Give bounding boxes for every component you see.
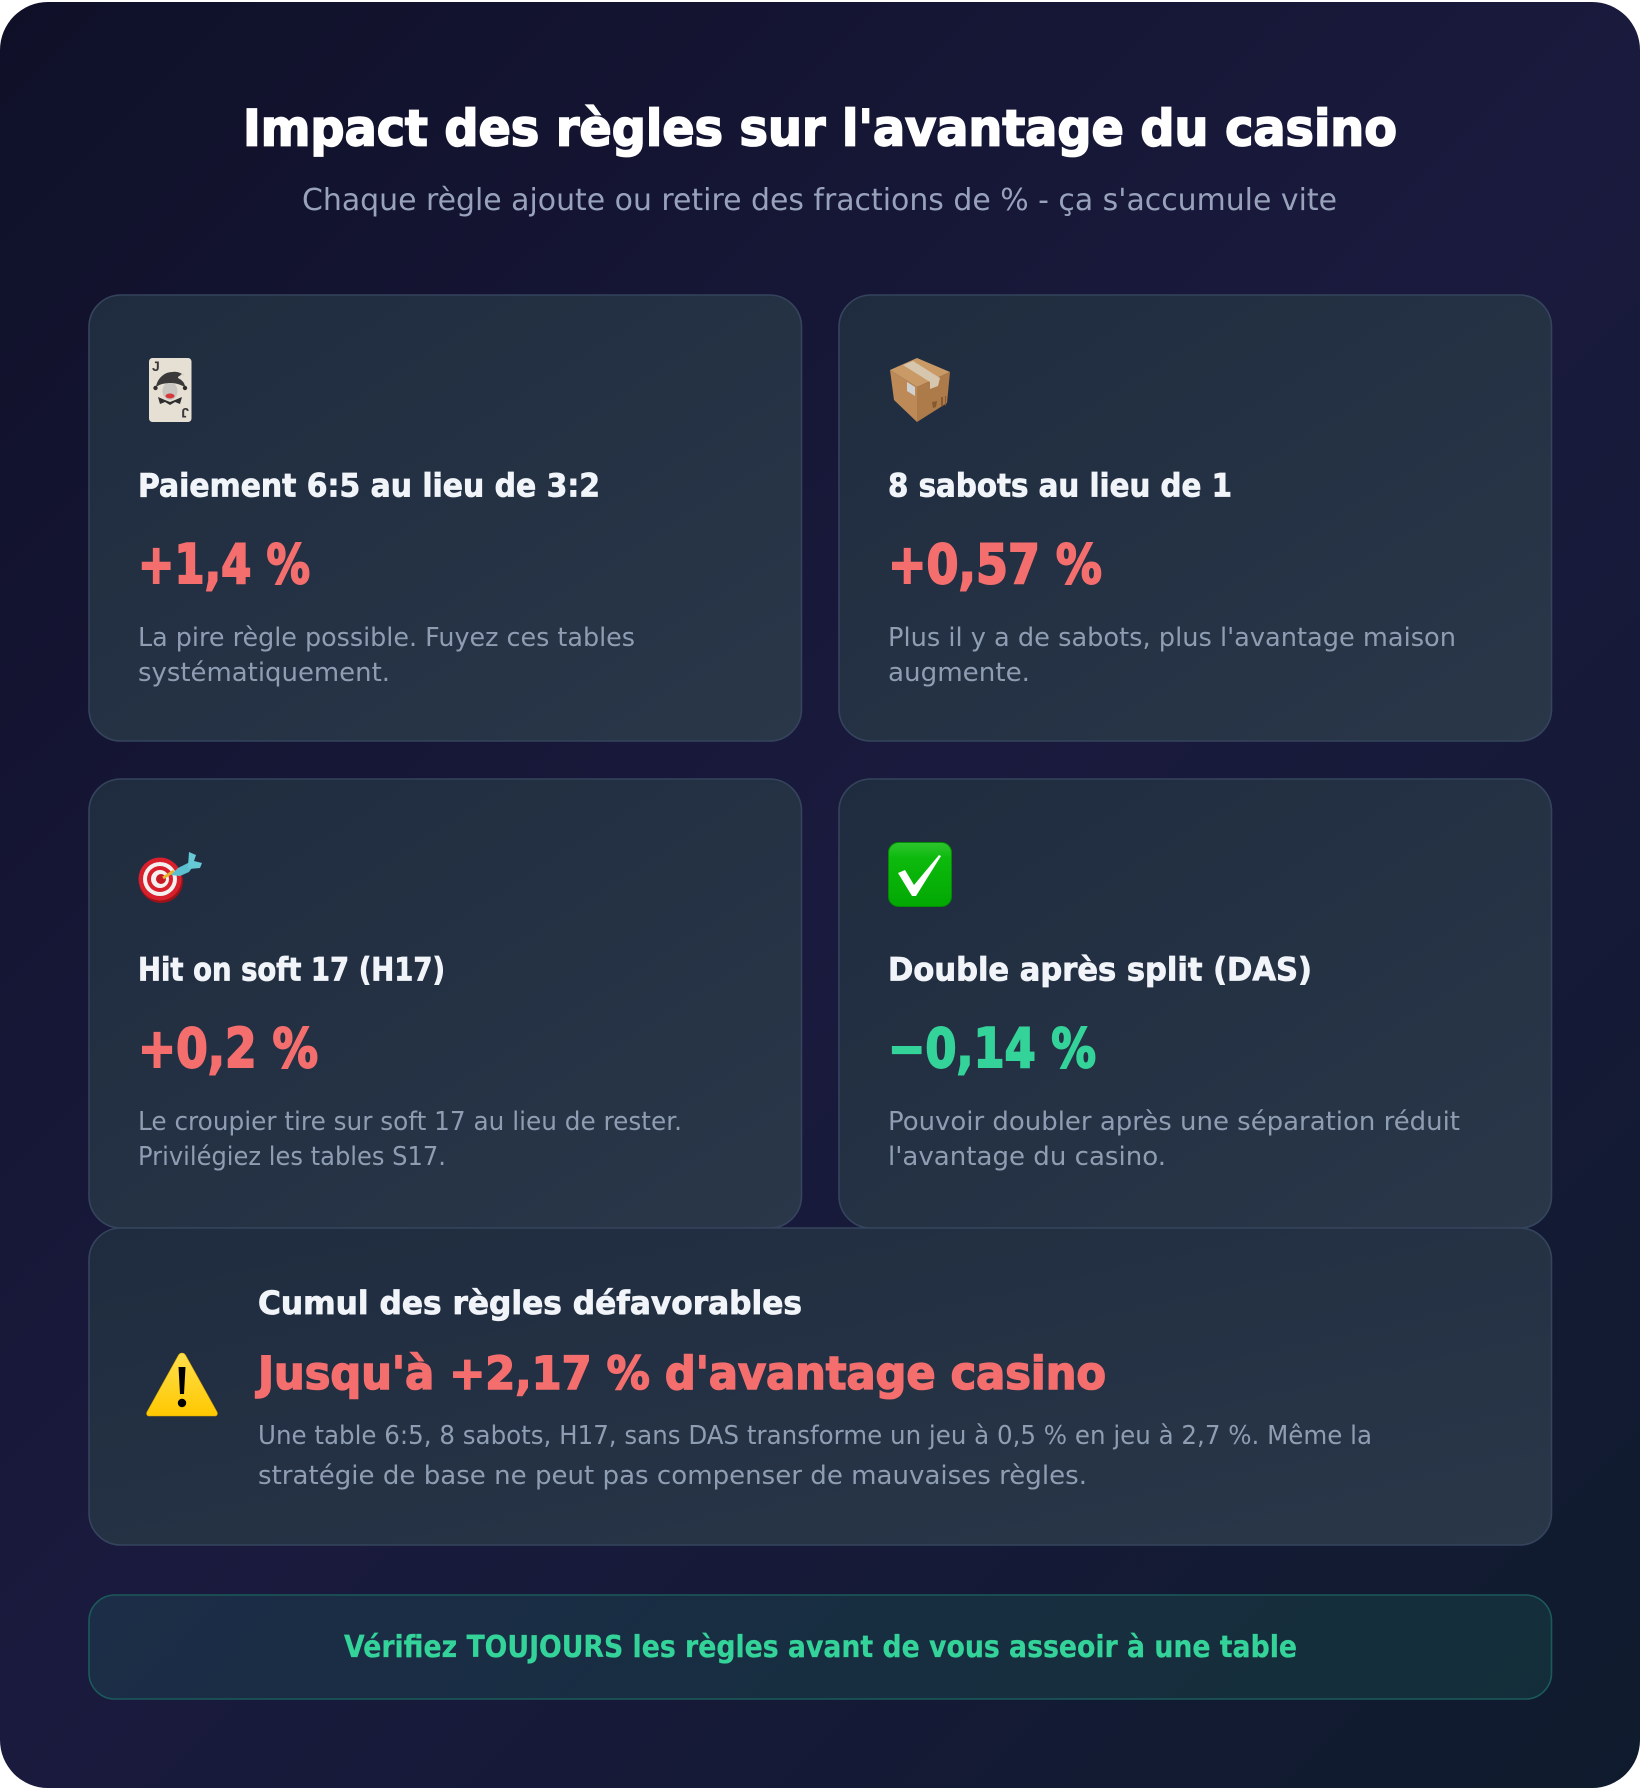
cumul heading: Cumul des règles défavorables <box>258 1284 802 1322</box>
card title: Paiement 6:5 au lieu de 3:2 <box>138 466 600 504</box>
card title: 8 sabots au lieu de 1 <box>888 466 1232 504</box>
panel: 8 sabots <box>839 295 1552 741</box>
value: +0,57 % <box>888 533 1102 596</box>
description: systématiquement. <box>138 658 390 688</box>
description <box>138 623 635 688</box>
cumul description <box>258 1421 1372 1491</box>
panel: H17 <box>89 779 802 1228</box>
description: Plus il y a de sabots, plus l'avantage maison <box>888 623 1456 653</box>
value: +1,4 % <box>138 533 310 596</box>
value: −0,14 % <box>888 1017 1096 1080</box>
description: Le croupier tire sur soft 17 au lieu de rester. <box>138 1107 682 1137</box>
title: Impact des règles sur l'avantage du casino <box>243 100 1397 158</box>
description: Privilégiez les tables S17. <box>138 1142 446 1172</box>
panel: paiement 6:5 <box>89 295 802 741</box>
icon: dart target <box>138 852 202 903</box>
card title: Hit on soft 17 (H17) <box>138 950 445 988</box>
panel: DAS <box>839 779 1552 1228</box>
card title: Double après split (DAS) <box>888 950 1312 988</box>
description: l'avantage du casino. <box>888 1142 1166 1172</box>
cumul description: Une table 6:5, 8 sabots, H17, sans DAS transforme un jeu à 0,5 % en jeu à 2,7 %. Même la <box>258 1421 1372 1451</box>
icon: joker card: J <box>181 405 189 421</box>
cumul value: Jusqu'à +2,17 % d'avantage casino <box>255 1347 1106 1400</box>
icon: warning <box>147 1353 217 1416</box>
panel: cumul <box>89 1228 1552 1545</box>
icon: package box <box>890 358 950 422</box>
icon: joker card <box>149 358 192 422</box>
description <box>888 1107 1460 1172</box>
description: Pouvoir doubler après une séparation réduit <box>888 1107 1460 1137</box>
value: +0,2 % <box>138 1017 318 1080</box>
callout <box>89 1595 1552 1699</box>
callout text: Vérifiez TOUJOURS les règles avant de vous asseoir à une table <box>344 1630 1297 1665</box>
description: La pire règle possible. Fuyez ces tables <box>138 623 635 653</box>
description <box>888 623 1456 688</box>
icon: check mark <box>888 842 952 906</box>
description: augmente. <box>888 658 1030 688</box>
description <box>138 1107 682 1172</box>
cumul description: stratégie de base ne peut pas compenser de mauvaises règles. <box>258 1461 1087 1491</box>
subtitle: Chaque règle ajoute ou retire des fractions de % - ça s'accumule vite <box>302 183 1337 218</box>
icon: joker card: J <box>152 358 160 374</box>
